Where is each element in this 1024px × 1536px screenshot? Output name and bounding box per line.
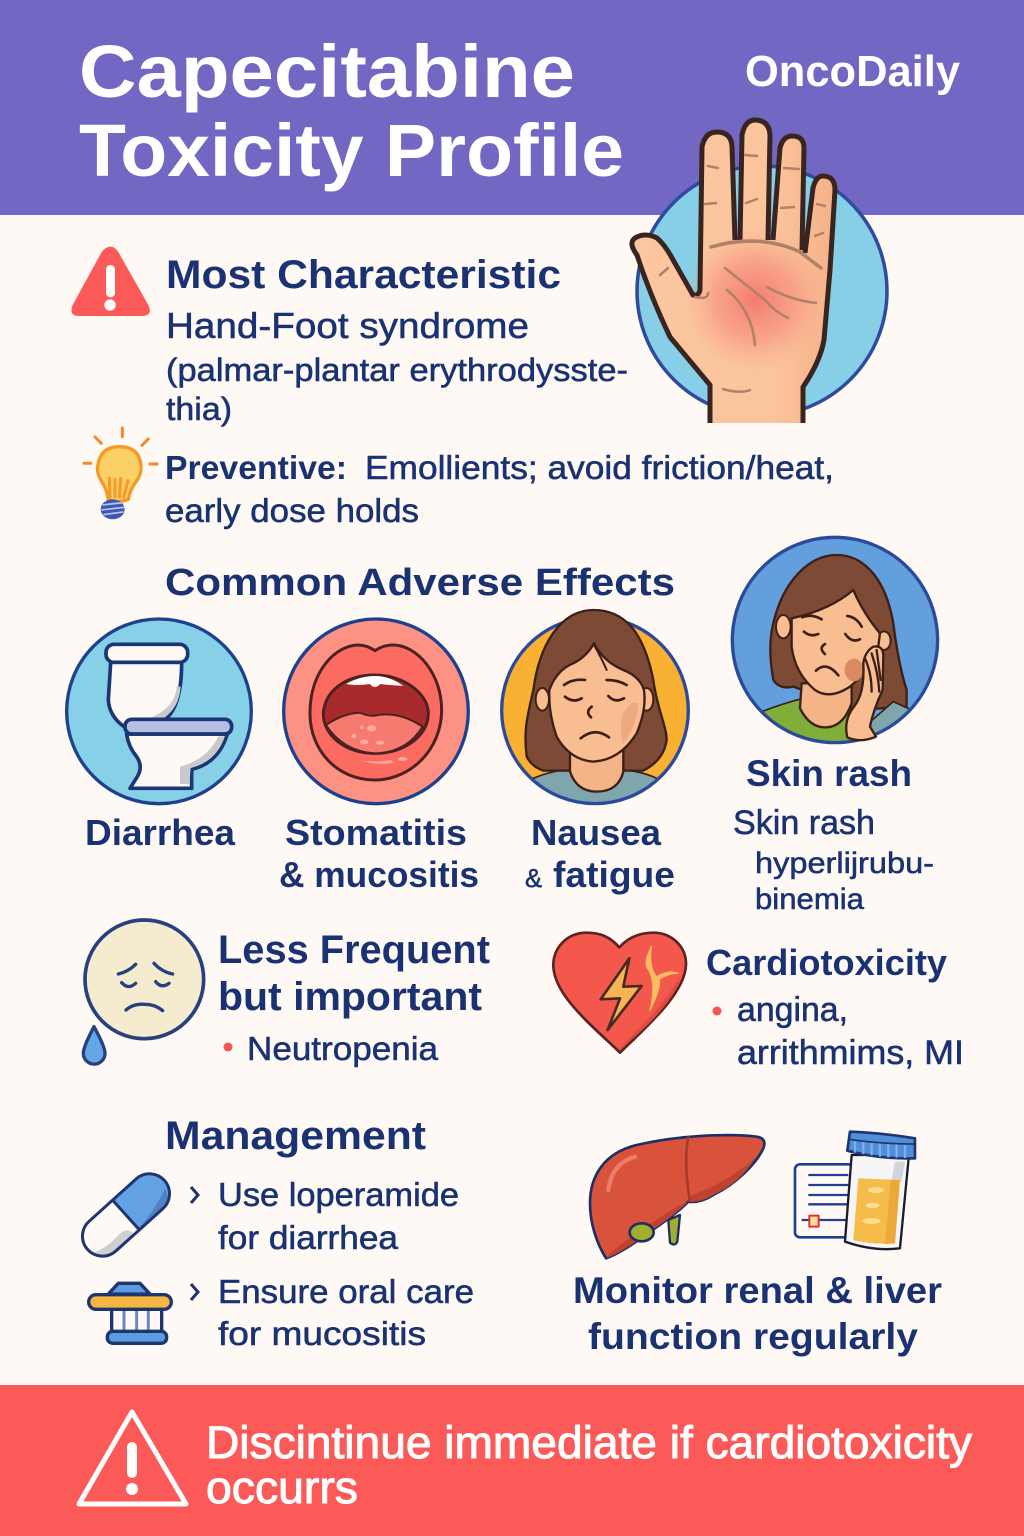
details: Skin rash [733, 804, 875, 842]
icon: open mouth [284, 619, 468, 804]
preventive text: Emollients; avoid friction/heat, [365, 449, 834, 486]
icon: broken heart with lightning [553, 933, 686, 1053]
icon: hand with palm redness [632, 120, 887, 423]
item: nausea and fatigue [502, 610, 688, 895]
icon: oral care [89, 1283, 171, 1343]
panel: most characteristic toxicity [71, 247, 628, 427]
caption: function regularly [588, 1316, 918, 1357]
label: Stomatitis [285, 812, 467, 853]
icon: sad face with tear [83, 920, 204, 1064]
bullet: oral care [191, 1273, 474, 1352]
title [79, 30, 624, 192]
caption [573, 1270, 942, 1357]
heading: Cardiotoxicity [706, 942, 947, 983]
warning text [206, 1417, 973, 1513]
panel: less frequent but important [83, 920, 490, 1067]
heading: Less Frequent [218, 928, 490, 972]
panel: management [74, 1114, 474, 1352]
description: Hand-Foot syndrome [166, 305, 529, 346]
bullet: oral care: for mucositis [218, 1315, 426, 1352]
warning text: Discintinue immediate if cardiotoxicity [206, 1417, 973, 1468]
icon: lab report and urine sample [795, 1132, 915, 1249]
brand name: OncoDaily [745, 47, 961, 96]
item: stomatitis and mucositis [279, 619, 479, 895]
icon: light bulb [84, 428, 157, 519]
details [733, 804, 934, 916]
bullet: oral care: Ensure oral care [218, 1273, 474, 1310]
preventive text: early dose holds [165, 492, 419, 529]
title: Toxicity Profile [79, 109, 624, 192]
details: hyperlijrubu- [755, 847, 934, 880]
label: Diarrhea [85, 812, 236, 853]
bullet: neutropenia: Neutropenia [247, 1030, 439, 1067]
banner: discontinue warning [0, 1385, 1024, 1536]
description: (palmar-plantar erythrodysste- [166, 352, 628, 388]
icon: toilet [67, 619, 251, 804]
preventive text: Preventive: [165, 449, 347, 486]
bullet: symptoms [712, 991, 964, 1072]
heading: Management [165, 1114, 426, 1158]
icon: warning outline [79, 1412, 186, 1504]
item: diarrhea [67, 619, 251, 853]
panel: preventive [84, 428, 834, 529]
bullet: loperamide [191, 1176, 459, 1256]
label: Nausea [531, 812, 662, 853]
details: binemia [755, 883, 864, 916]
heading: common adverse effects: Common Adverse Effects [165, 562, 675, 604]
title: Capecitabine [79, 30, 575, 113]
description [166, 305, 628, 427]
bullet: symptoms: angina, [737, 991, 848, 1029]
panel: cardiotoxicity [553, 933, 964, 1072]
icon: liver [590, 1135, 764, 1258]
header band [0, 0, 1024, 215]
label: & [525, 863, 542, 893]
label: fatigue [553, 854, 675, 895]
label: Skin rash [746, 753, 912, 794]
heading [218, 928, 490, 1019]
caption: Monitor renal & liver [573, 1270, 942, 1311]
icon: tired woman on orange [502, 610, 688, 807]
item: skin rash [732, 537, 938, 916]
bullet: loperamide: for diarrhea [218, 1219, 399, 1256]
preventive text [165, 449, 834, 529]
icon: woman touching cheek on blue [732, 537, 938, 750]
bullet: loperamide: Use loperamide [218, 1176, 459, 1213]
bullet: symptoms: arrithmims, MI [737, 1034, 964, 1072]
icon: warning triangle [71, 247, 150, 316]
heading: but important [218, 975, 482, 1019]
description: thia) [166, 391, 232, 427]
label [279, 812, 479, 895]
heading: Most Characteristic [166, 253, 561, 297]
warning text: occurrs [206, 1462, 358, 1513]
icon: capsule [74, 1166, 178, 1264]
panel: monitoring [573, 1132, 942, 1357]
label: & mucositis [279, 854, 479, 895]
label [525, 812, 675, 895]
